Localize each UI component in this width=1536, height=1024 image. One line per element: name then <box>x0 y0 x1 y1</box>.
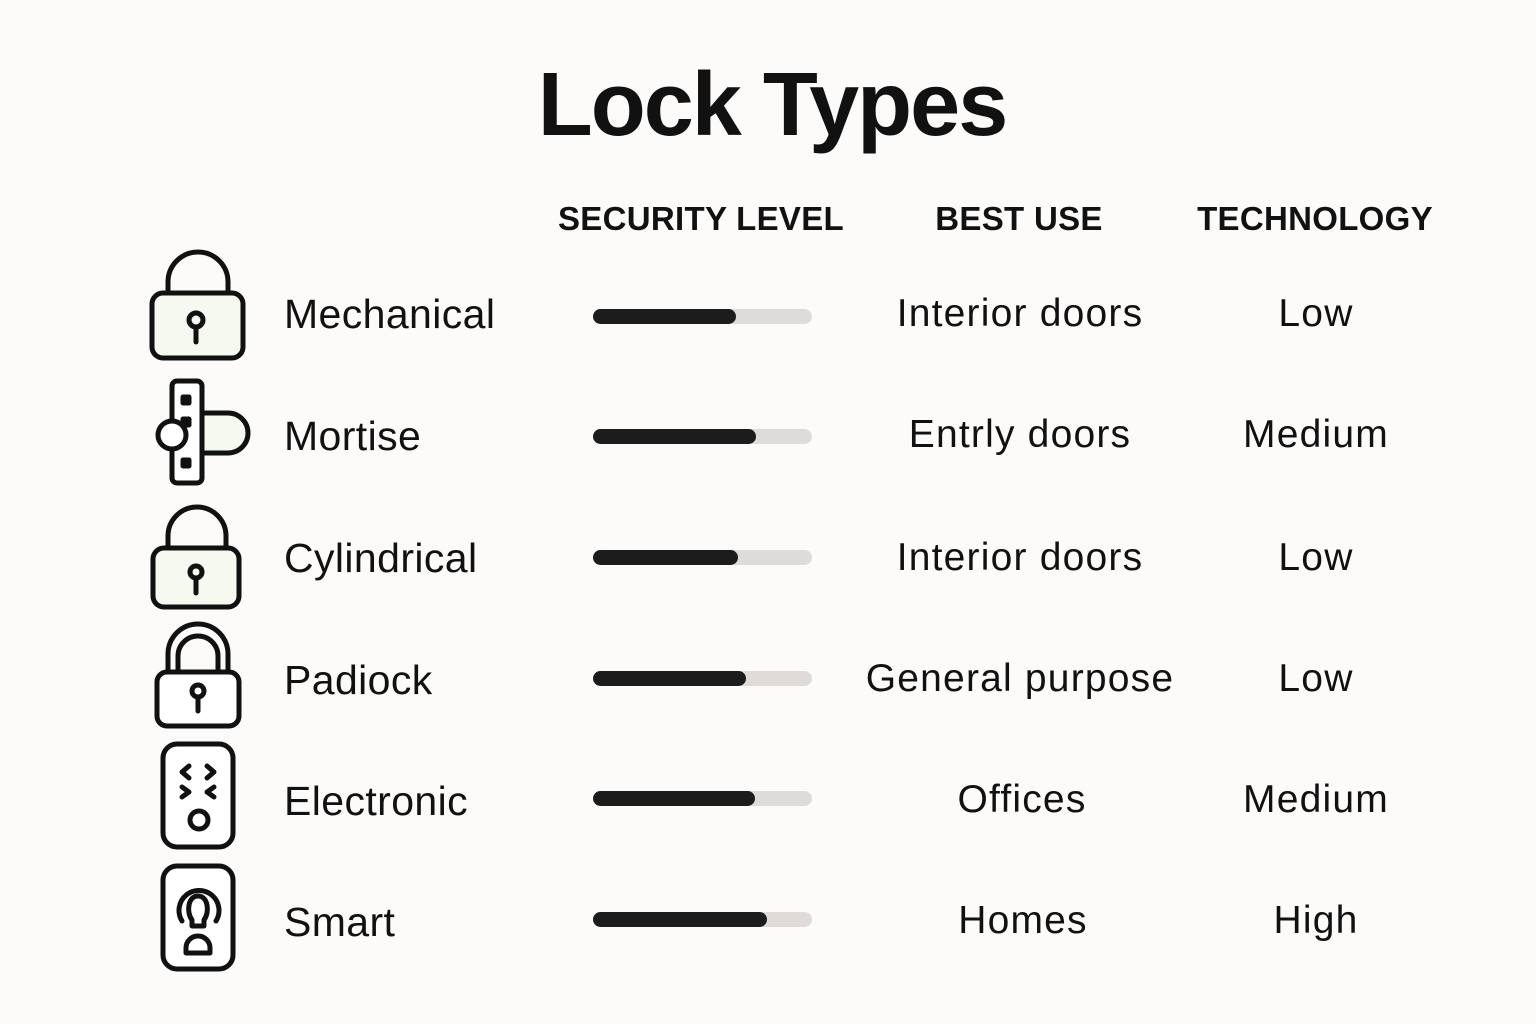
row: padlock: Padiock <box>284 657 433 703</box>
row: mechanical: Mechanical <box>284 291 495 337</box>
technology: padlock: Low <box>1278 657 1354 700</box>
bar: smart security <box>593 912 812 927</box>
technology: mechanical: Low <box>1278 292 1354 335</box>
icon: smart lock <box>160 864 236 972</box>
best use: smart: Homes <box>958 899 1088 942</box>
technology: mortise: Medium <box>1243 413 1389 456</box>
row: cylindrical: Cylindrical <box>284 535 478 581</box>
icon: mechanical padlock <box>150 250 246 360</box>
best use: cylindrical: Interior doors <box>897 536 1143 579</box>
technology: electronic: Medium <box>1243 778 1389 821</box>
header: security level: SECURITY LEVEL <box>558 200 844 237</box>
icon: electronic lock <box>160 742 236 850</box>
title: Lock Types <box>538 55 1006 155</box>
row: electronic: Electronic <box>284 778 468 824</box>
header: technology: TECHNOLOGY <box>1197 200 1433 237</box>
icon: cylindrical lock <box>150 504 242 610</box>
header: best use: BEST USE <box>935 200 1103 237</box>
best use: padlock: General purpose <box>866 657 1174 700</box>
bar: mortise security <box>593 429 812 444</box>
best use: mortise: Entrly doors <box>909 413 1131 456</box>
bar: electronic security <box>593 791 812 806</box>
row: mortise: Mortise <box>284 413 421 459</box>
bar: padlock security <box>593 671 812 686</box>
bar: cylindrical security <box>593 550 812 565</box>
row: smart: Smart <box>284 899 395 945</box>
technology: cylindrical: Low <box>1278 536 1354 579</box>
icon: mortise lock <box>156 378 250 486</box>
best use: mechanical: Interior doors <box>897 292 1143 335</box>
icon: padlock <box>154 622 242 728</box>
best use: electronic: Offices <box>957 778 1087 821</box>
bar: mechanical security <box>593 309 812 324</box>
technology: smart: High <box>1273 899 1358 942</box>
